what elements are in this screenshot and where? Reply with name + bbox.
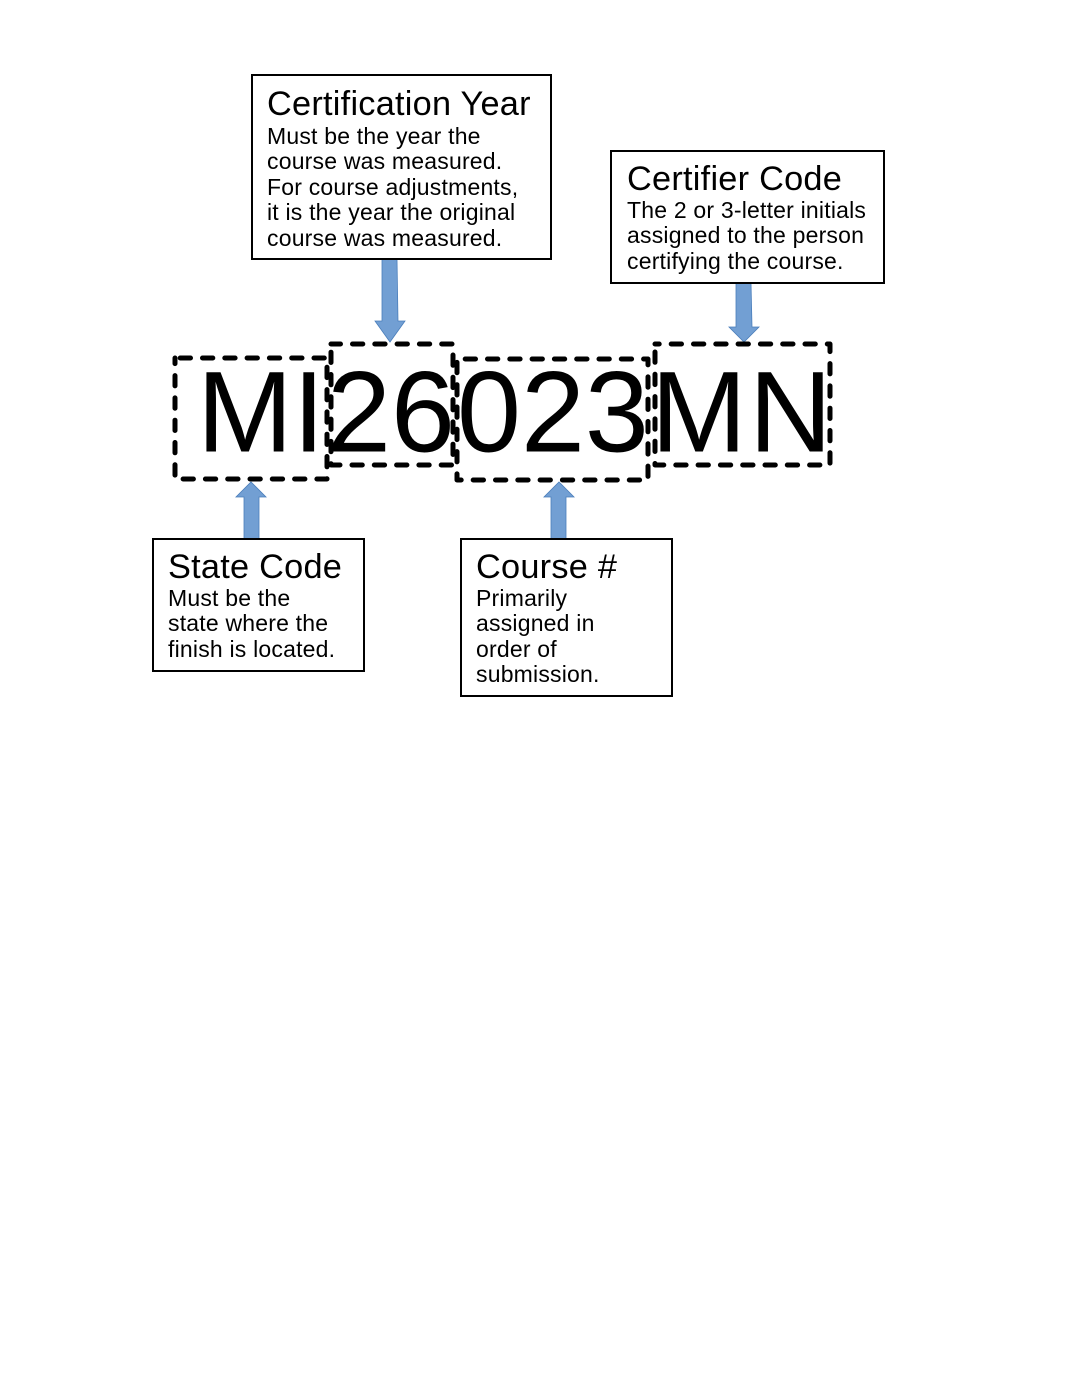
text: course number description: Primarily — [476, 585, 568, 611]
text: certification year description: course was measured. — [267, 225, 502, 251]
text: course number description: assigned in — [476, 610, 595, 636]
arrow: course number — [544, 482, 574, 539]
arrow: certification year — [375, 259, 405, 342]
text: certifier code description: certifying the course. — [627, 248, 844, 274]
arrow: certifier code — [729, 283, 759, 342]
text: certification year description: course was measured. — [267, 148, 502, 174]
heading: certifier code: Certifier Code — [627, 160, 842, 198]
dashed box: certifier — [655, 344, 830, 465]
text: certification year description: Must be the year the — [267, 123, 481, 149]
text: state code description: state where the — [168, 610, 328, 636]
text: certification year description — [267, 123, 518, 251]
code segment: certifier MN: MN — [651, 349, 832, 477]
heading: course number: Course # — [476, 548, 617, 586]
panel: state code — [153, 539, 364, 671]
text: state code description: Must be the — [168, 585, 290, 611]
text: certification year description: For course adjustments, — [267, 174, 518, 200]
text: state code description — [168, 585, 335, 662]
dashed box: course — [457, 359, 648, 480]
heading: state code: State Code — [168, 548, 342, 586]
text: course number description: submission. — [476, 661, 600, 687]
dashed box: state — [175, 358, 327, 479]
panel: certification year — [252, 75, 551, 259]
panel: course number — [461, 539, 672, 696]
text: certifier code description — [627, 197, 866, 274]
code segment: course 023: 023 — [457, 349, 649, 477]
text: certifier code description: The 2 or 3-letter initials — [627, 197, 866, 223]
code segment: state MI: MI — [197, 349, 325, 477]
heading: certification year: Certification Year — [267, 85, 531, 123]
text: state code description: finish is located. — [168, 636, 335, 662]
dashed box: year — [331, 344, 453, 465]
arrow: state code — [236, 482, 266, 539]
text: certification year description: it is the year the original — [267, 199, 515, 225]
text: certifier code description: assigned to the person — [627, 222, 864, 248]
code segment: year 26: 26 — [327, 349, 455, 477]
text: course number description — [476, 585, 600, 687]
panel: certifier code — [611, 151, 884, 283]
text: course number description: order of — [476, 636, 557, 662]
